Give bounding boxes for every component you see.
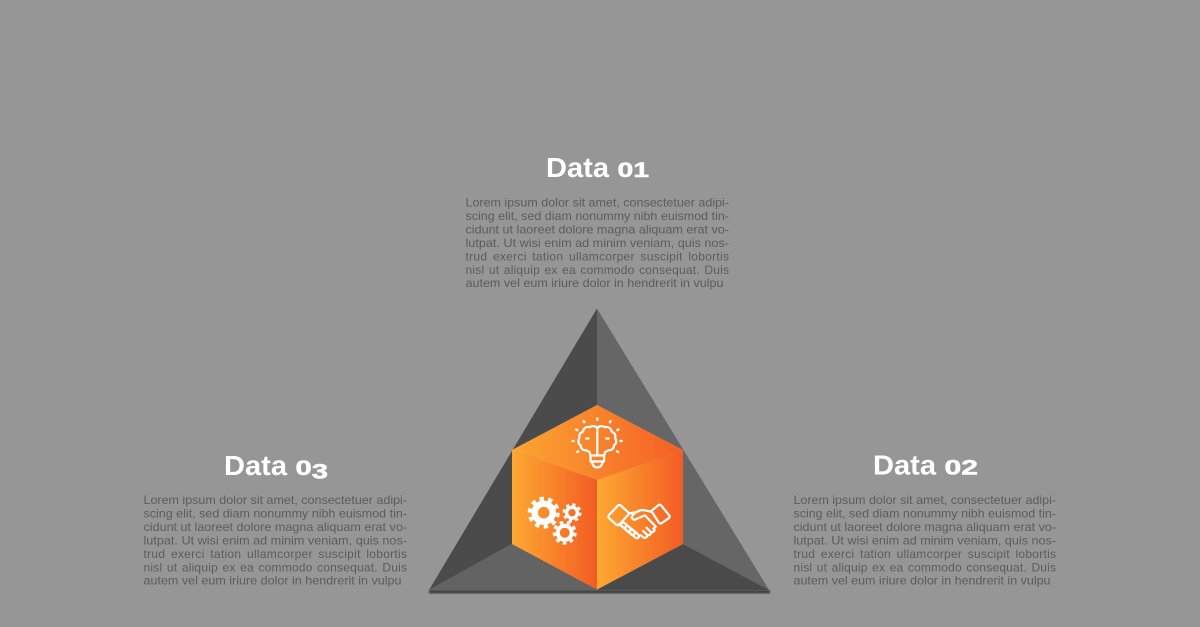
pyramid base shadow (429, 590, 770, 594)
heading: Data 02: 02 (944, 456, 978, 480)
text block: Data 01: autem vel eum iriure dolor in hendrerit in vulpu (466, 276, 724, 290)
text block: Data 01: lutpat. Ut wisi enim ad minim veniam, quis nos- (466, 236, 729, 250)
text block: Data 03: nisl ut aliquip ex ea commodo consequat. Duis (144, 560, 407, 574)
text block: Data 02: Lorem ipsum dolor sit amet, consectetuer adipi- (794, 493, 1056, 507)
cube top face (512, 405, 683, 480)
heading: Data 01 (546, 152, 649, 183)
cube (512, 405, 683, 590)
heading: Data 02: Data (873, 450, 937, 480)
text block: Data 01: Lorem ipsum dolor sit amet, consectetuer adipi- (466, 196, 729, 210)
text block: Data 03: cidunt ut laoreet dolore magna aliquam erat vo- (144, 520, 407, 534)
text block: Data 03: Lorem ipsum dolor sit amet, consectetuer adipi- (144, 493, 407, 507)
text block: Data 03: trud exerci tation ullamcorper suscipit lobortis (144, 547, 407, 561)
heading: Data 02 (873, 450, 978, 480)
pyramid face: lower left (429, 544, 597, 590)
text block: Data 02: scing elit, sed diam nonummy nibh euismod tin- (794, 506, 1056, 520)
cube left face (512, 450, 597, 590)
icon: handshake (608, 505, 670, 539)
heading: Data 03: 3 (312, 460, 328, 484)
text block: Data 03: autem vel eum iriure dolor in hendrerit in vulpu (144, 574, 402, 588)
text block: Data 01: trud exerci tation ullamcorper suscipit lobortis (466, 249, 729, 263)
text block: Data 01: scing elit, sed diam nonummy nibh euismod tin- (466, 209, 729, 223)
text block: Data 01: nisl ut aliquip ex ea commodo consequat. Duis (466, 263, 729, 277)
pyramid face: lower right (597, 544, 769, 590)
text block: Data 01 (466, 196, 729, 290)
heading: Data 01: Data (546, 152, 610, 183)
text block: Data 03 (144, 493, 407, 588)
text block: Data 01: cidunt ut laoreet dolore magna aliquam erat vo- (466, 222, 729, 236)
text block: Data 02: cidunt ut laoreet dolore magna aliquam erat vo- (794, 520, 1056, 534)
pyramid face: upper right (597, 308, 769, 590)
heading: Data 03: Data (224, 450, 288, 481)
cube right face (597, 450, 683, 590)
heading: Data 03: 0 (296, 457, 307, 480)
text block: Data 02: nisl ut aliquip ex ea commodo consequat. Duis (794, 560, 1056, 574)
pyramid face: upper left (429, 308, 597, 590)
text block: Data 02: lutpat. Ut wisi enim ad minim veniam, quis nos- (794, 533, 1056, 547)
icon: gears (530, 499, 580, 543)
heading: Data 03 (224, 450, 328, 484)
text block: Data 02: autem vel eum iriure dolor in hendrerit in vulpu (794, 574, 1050, 588)
text block: Data 03: lutpat. Ut wisi enim ad minim veniam, quis nos- (144, 533, 407, 547)
icon: brain light bulb (571, 418, 623, 468)
text block: Data 03: scing elit, sed diam nonummy nibh euismod tin- (144, 506, 407, 520)
text block: Data 02: trud exerci tation ullamcorper suscipit lobortis (794, 547, 1056, 561)
pyramid diagram (429, 308, 770, 594)
heading: Data 01: 01 (618, 159, 649, 182)
text block: Data 02 (794, 493, 1056, 588)
